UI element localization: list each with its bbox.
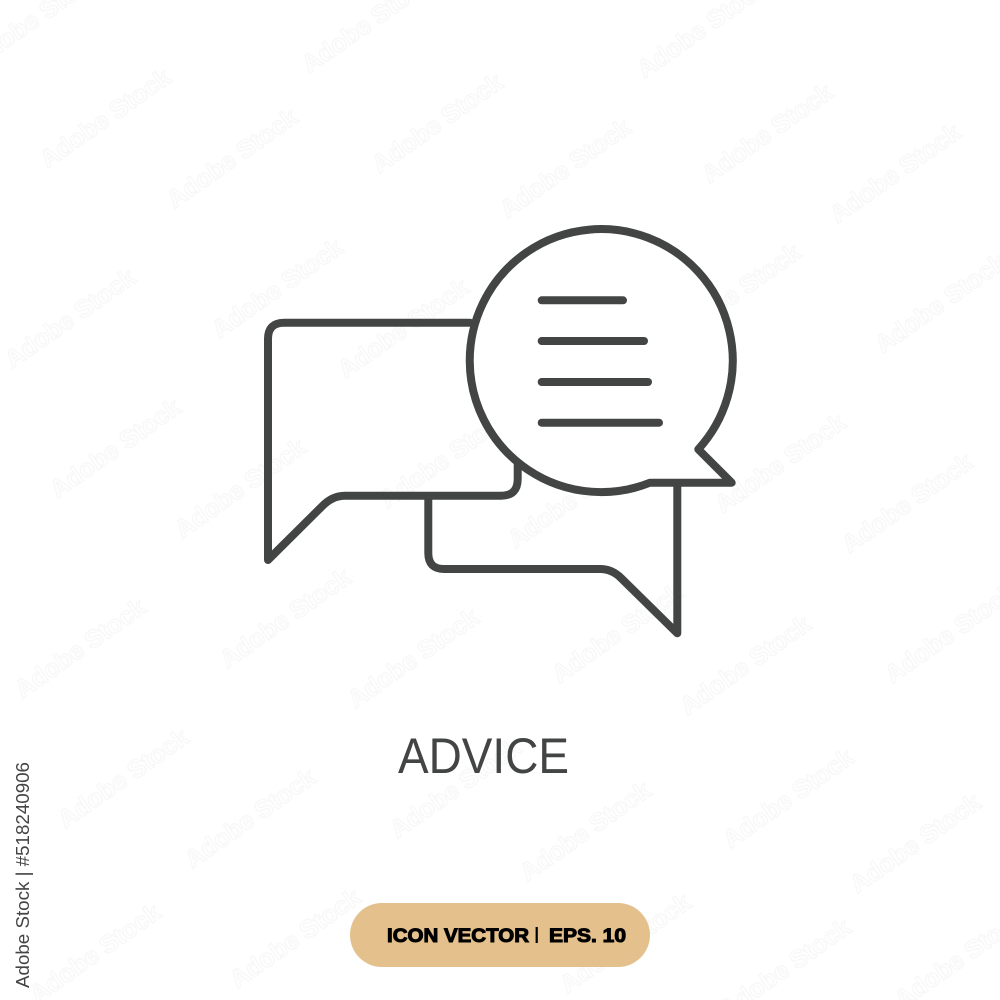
- icon: text lines in round bubble: [542, 300, 659, 423]
- watermark pattern: Adobe Stock: [845, 788, 986, 899]
- watermark pattern: Adobe Stock: [333, 273, 474, 384]
- watermark pattern: Adobe Stock: [718, 743, 859, 854]
- watermark pattern: Adobe Stock: [0, 263, 141, 374]
- watermark pattern: Adobe Stock: [170, 433, 311, 544]
- watermark pattern: Adobe Stock: [675, 610, 816, 721]
- watermark pattern: Adobe Stock: [503, 443, 644, 554]
- icon: advice speech bubbles: [268, 229, 733, 633]
- watermark pattern: Adobe Stock: [375, 403, 516, 514]
- vertical stock id text: Adobe Stock | #518240906: [13, 762, 33, 988]
- watermark pattern: Adobe Stock: [555, 888, 696, 999]
- watermark pattern: Adobe Stock: [825, 118, 966, 229]
- watermark pattern: Adobe Stock: [665, 238, 806, 349]
- watermark pattern: Adobe Stock: [215, 563, 356, 674]
- watermark pattern: Adobe Stock: [343, 603, 484, 714]
- watermark pattern: Adobe Stock: [547, 578, 688, 689]
- title: ADVICE: ADVICE: [398, 728, 569, 784]
- badge: icon vector label: EPS. 10: [549, 926, 626, 947]
- watermark pattern: Adobe Stock: [180, 763, 321, 874]
- watermark pattern: Adobe Stock: [45, 393, 186, 504]
- watermark pattern: Adobe Stock: [697, 78, 838, 189]
- watermark pattern: Adobe Stock: [515, 776, 656, 887]
- watermark pattern: Adobe Stock: [225, 883, 366, 994]
- badge: icon vector label: ICON VECTOR: [387, 926, 529, 947]
- watermark pattern: Adobe Stock: [495, 113, 636, 224]
- watermark pattern: Adobe Stock: [35, 63, 176, 174]
- watermark pattern: Adobe Stock: [367, 68, 508, 179]
- icon: lower right speech bubble: [428, 483, 677, 633]
- icon: left speech bubble: [268, 323, 518, 560]
- icon: round speech bubble: [470, 229, 733, 492]
- watermark pattern: Adobe Stock: [385, 733, 526, 844]
- badge: icon vector label: [350, 903, 650, 967]
- watermark pattern: Adobe Stock: [162, 103, 303, 214]
- watermark pattern: Adobe Stock: [710, 408, 851, 519]
- watermark pattern: Adobe Stock: [837, 448, 978, 559]
- watermark pattern: Adobe Stock: [53, 723, 194, 834]
- watermark pattern: Adobe Stock: [10, 593, 151, 704]
- watermark pattern: Adobe Stock: [207, 233, 348, 344]
